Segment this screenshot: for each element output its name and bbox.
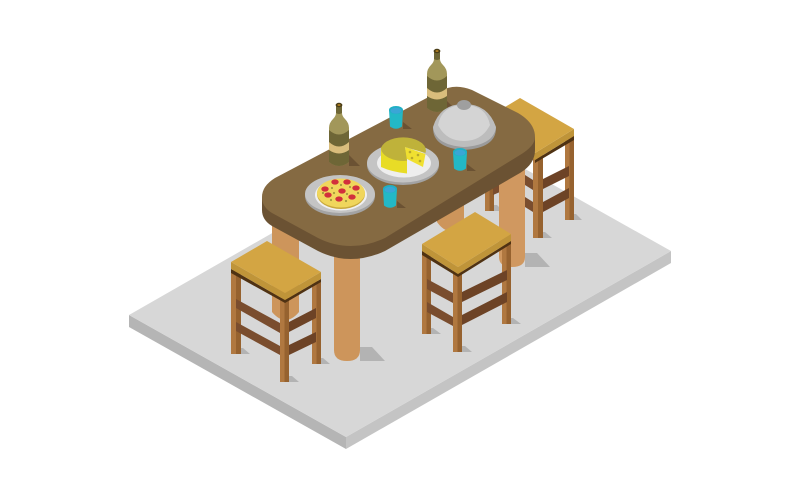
floor shadows [241, 205, 582, 382]
floor slab [129, 129, 671, 449]
bottle: left [329, 103, 349, 166]
table item shadows [349, 101, 476, 208]
front left stool [231, 241, 321, 382]
back stool [480, 98, 574, 238]
table legs [272, 160, 525, 361]
cloche on plate [433, 100, 496, 150]
plate with pizza [305, 175, 375, 216]
cup: right [453, 148, 467, 171]
cup: back [389, 106, 403, 129]
pizza [317, 178, 365, 209]
bottle: right [427, 49, 447, 112]
table top [262, 87, 535, 259]
plate with cheese [367, 137, 439, 185]
front right stool [422, 212, 511, 352]
cup: front [383, 185, 397, 208]
cheese wheel [381, 137, 426, 174]
